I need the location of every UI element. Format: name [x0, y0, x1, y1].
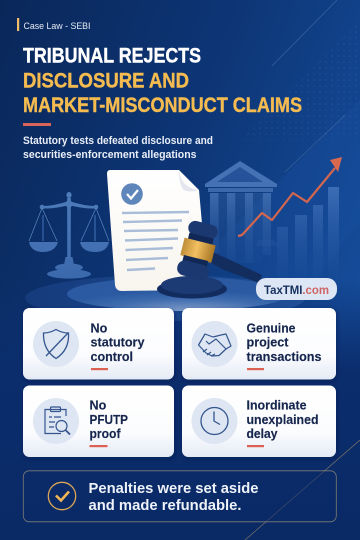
card: no PFUTP proof [23, 386, 174, 457]
card: inordinate unexplained delay: delay [246, 427, 278, 441]
title accent bar [23, 123, 51, 126]
podium floor [25, 275, 305, 321]
icon: scales of justice [29, 192, 109, 279]
card: inordinate unexplained delay: Inordinate [246, 398, 306, 412]
subtitle: Statutory tests defeated disclosure and [23, 135, 213, 147]
icon: shield with slash [43, 330, 69, 358]
card: inordinate unexplained delay: unexplained [246, 413, 318, 427]
icon: document with check [107, 170, 207, 291]
card: no PFUTP proof: PFUTP [90, 413, 128, 427]
subtitle: securities-enforcement allegations [23, 149, 196, 161]
callout: outcome: and made refundable. [88, 498, 242, 514]
card: no statutory control: No [90, 322, 108, 336]
callout: outcome [23, 471, 336, 522]
title [23, 43, 302, 117]
card: no PFUTP proof: No [90, 398, 107, 412]
icon: clock [201, 408, 228, 434]
card: inordinate unexplained delay [182, 386, 336, 457]
icon: gavel [157, 219, 262, 298]
eyebrow: case law label: Case Law - SEBI [24, 21, 90, 31]
illustration: legal and market scene [25, 157, 342, 321]
title: MARKET-MISCONDUCT CLAIMS [23, 93, 302, 117]
subtitle [23, 135, 213, 161]
title: DISCLOSURE AND [23, 68, 189, 92]
logo: TaxTMI.com: TaxTMI.com [264, 283, 329, 297]
card: genuine project transactions: transactions [246, 350, 322, 364]
icon: courthouse [205, 161, 279, 263]
eyebrow: case law label [17, 18, 90, 31]
title: TRIBUNAL REJECTS [23, 43, 201, 67]
callout: outcome: Penalties were set aside [88, 481, 258, 497]
card: genuine project transactions [182, 308, 336, 380]
arrow: rising trend line [238, 157, 342, 236]
card: no statutory control: control [90, 350, 133, 364]
icon: handshake [198, 334, 231, 356]
card: no statutory control [23, 308, 174, 380]
card: genuine project transactions: project [246, 336, 289, 350]
card: genuine project transactions: Genuine [246, 322, 296, 336]
icon: gold check [48, 482, 76, 510]
card: no statutory control: statutory [90, 336, 144, 350]
logo: TaxTMI.com [256, 278, 337, 300]
icon: clipboard with magnifier [45, 407, 70, 434]
bar chart backdrop [277, 187, 339, 285]
card: no PFUTP proof: proof [90, 427, 121, 441]
